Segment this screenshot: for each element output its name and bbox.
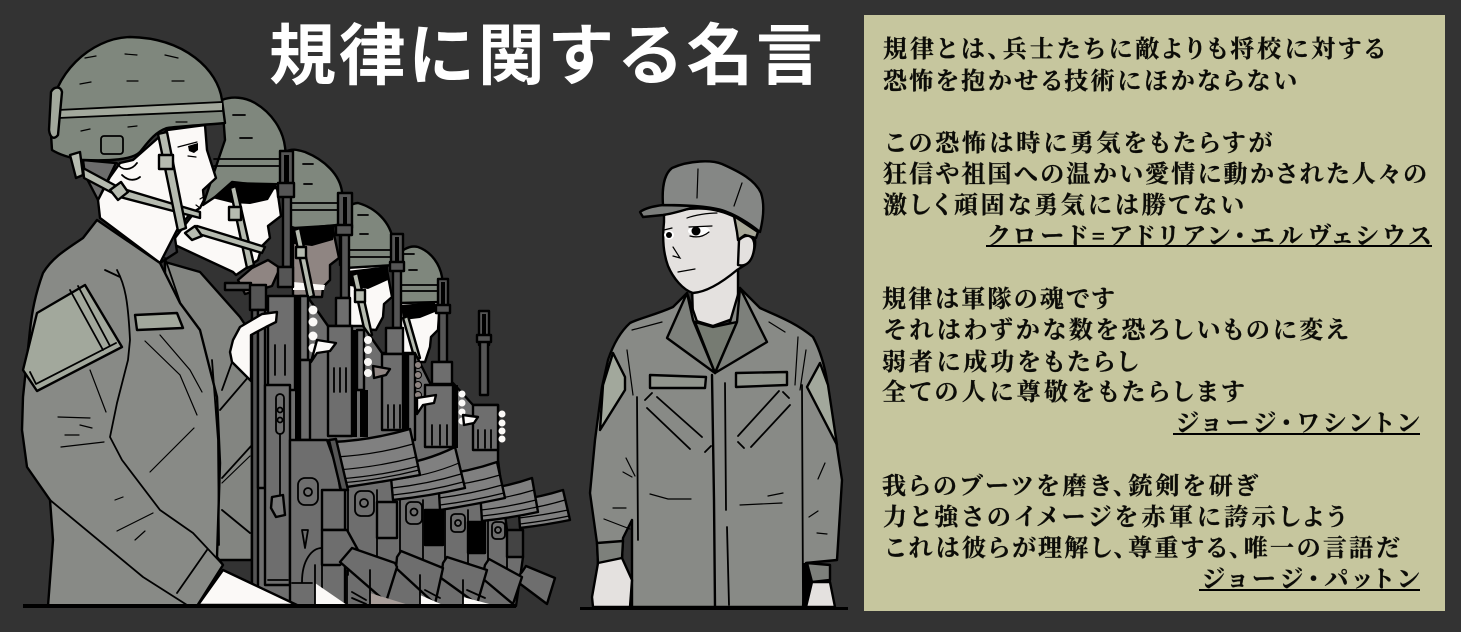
quote 2: Washington: それはわずかな数を恐ろしいものに変え <box>884 317 1348 344</box>
undershirt <box>695 322 737 373</box>
quote 3: Patton: これは彼らが理解し、尊重する、唯一の言語だ <box>885 534 1400 562</box>
soldier 5 head <box>395 247 443 362</box>
quote 2: Washington: 規律は軍隊の魂です <box>882 286 1114 313</box>
chest pockets <box>645 372 790 452</box>
collar <box>667 288 767 373</box>
ear <box>117 163 140 180</box>
front hand <box>198 570 297 605</box>
cuffs <box>597 541 830 582</box>
rifle 1 <box>225 151 420 606</box>
soldier 3 head <box>285 150 345 298</box>
helmet <box>49 37 225 160</box>
cap <box>640 161 763 232</box>
quote 3: Patton: 力と強さのイメージを赤軍に誇示しよう <box>883 504 1346 531</box>
sleeve panels and seams <box>600 322 837 603</box>
jacket seams and pocket <box>50 258 250 605</box>
hands <box>592 558 835 607</box>
quote 1: Helvetius: この恐怖は時に勇気をもたらすが <box>885 130 1272 157</box>
eye <box>178 142 205 208</box>
quote 2: Washington <box>882 286 1420 437</box>
quote 1: Helvetius: 規律とは、兵士たちに敵よりも将校に対する <box>883 36 1385 63</box>
hair under helmet <box>83 160 116 200</box>
soldier 3 brown hand <box>238 260 280 294</box>
quote 3: Patton: 我らのブーツを磨き、銃剣を研ぎ <box>882 473 1259 500</box>
rifle 5 <box>473 311 570 604</box>
quote 1: Helvetius: 狂信や祖国への温かい愛情に動かされた人々の <box>883 161 1427 188</box>
rifle 4 <box>425 279 538 604</box>
rifle 2 <box>328 193 465 604</box>
soldier 1 front figure <box>22 37 297 606</box>
quote 2: Washington: 全ての人に尊敬をもたらします <box>882 378 1244 406</box>
quote 2: Washington: 弱者に成功をもたらし <box>882 349 1138 376</box>
rifle 3 <box>382 234 505 604</box>
rifle mass <box>252 296 523 606</box>
jacket <box>22 220 223 606</box>
chin straps <box>70 132 202 240</box>
rifle stock base <box>315 565 493 606</box>
rifles <box>225 151 570 606</box>
quote 2: Washington: ジョージ・ワシントン <box>1176 411 1419 437</box>
zipper and waist lines <box>604 375 827 607</box>
shoulder patch <box>23 285 122 391</box>
quote 1: Helvetius: 恐怖を抱かせる技術にほかならない <box>883 68 1297 95</box>
quote 1: Helvetius: 激しく頑固な勇気には勝てない <box>883 192 1244 219</box>
standing soldier in field uniform <box>590 161 842 607</box>
quote 1: Helvetius <box>883 36 1432 250</box>
ground line right <box>580 607 848 610</box>
panel: quotes <box>864 15 1445 611</box>
quote 3: Patton: ジョージ・パットン <box>1202 567 1419 593</box>
soldier 2 head and body <box>160 98 290 560</box>
soldier 4 head <box>340 203 396 337</box>
illustration: row of soldiers at attention <box>22 37 570 606</box>
quote 3: Patton <box>882 473 1420 593</box>
neck <box>692 265 738 326</box>
soldier 2 hand <box>230 312 277 381</box>
neck and face <box>98 125 216 263</box>
face <box>663 208 758 293</box>
quote 1: Helvetius: クロード=アドリアン・エルヴェシウス <box>988 223 1431 250</box>
title: 規律に関する名言 <box>269 19 823 94</box>
ground line left <box>23 604 516 608</box>
coverall <box>590 288 842 607</box>
